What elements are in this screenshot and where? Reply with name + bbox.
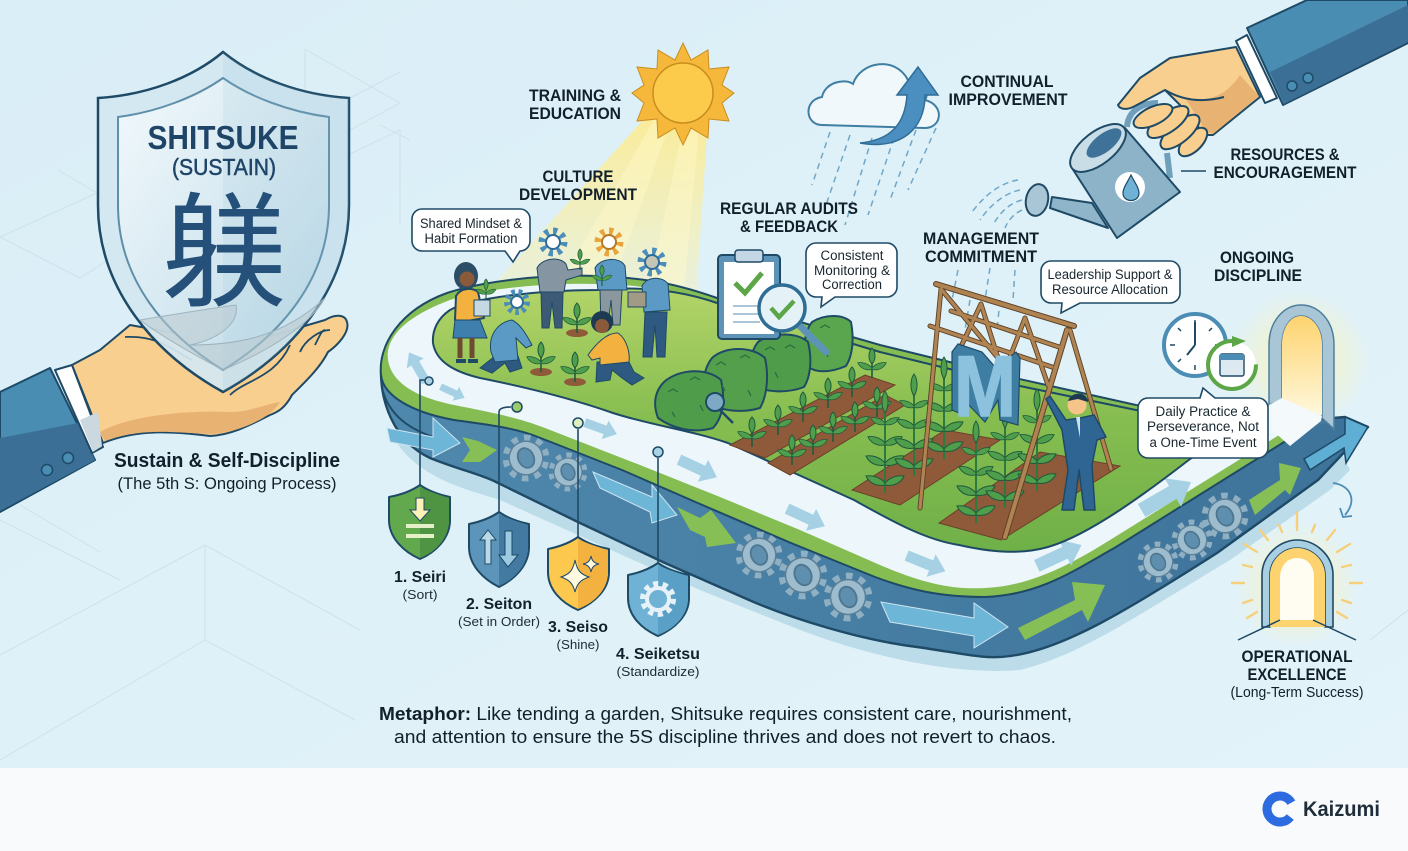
label: regular audits xyxy=(720,199,858,236)
hedges xyxy=(655,316,853,430)
label: regular audits: & FEEDBACK xyxy=(740,217,839,236)
excellence gate xyxy=(1232,512,1362,647)
icon: magnifier with check xyxy=(759,285,826,352)
process path: blue wall xyxy=(381,372,1368,657)
callout: consistent monitoring: Monitoring & xyxy=(814,263,890,278)
callout: daily practice: Daily Practice & xyxy=(1156,404,1250,419)
metaphor text: and attention to ensure the 5S discipline thrives and does not revert to chaos. xyxy=(394,727,1056,747)
label: culture development xyxy=(519,167,638,204)
metaphor text xyxy=(379,704,1072,747)
shield: Shitsuke xyxy=(98,52,349,392)
label: ongoing discipline: DISCIPLINE xyxy=(1214,266,1302,285)
callout: leadership support: Resource Allocation xyxy=(1052,282,1168,297)
Kaizumi logo: Kaizumi xyxy=(1303,798,1380,821)
label: resources and encouragement: RESOURCES & xyxy=(1230,145,1340,164)
shield: Seiton xyxy=(469,512,529,587)
label: resources and encouragement: ENCOURAGEMENT xyxy=(1214,163,1357,182)
label: 3. Seiso: (Shine) xyxy=(556,637,600,652)
5S pin dots xyxy=(425,377,663,457)
process path: white road xyxy=(388,284,1300,588)
label: training and education: TRAINING & xyxy=(529,86,621,105)
wall lower layer line xyxy=(383,392,445,441)
label: 2. Seiton xyxy=(458,596,540,629)
road direction arrows xyxy=(400,347,1199,582)
Kaizumi logo xyxy=(1262,791,1380,827)
icon: small magnifier xyxy=(706,393,733,423)
people xyxy=(453,231,670,385)
label: continual improvement: IMPROVEMENT xyxy=(948,90,1068,109)
person: kneeling yellow xyxy=(588,311,644,385)
callout: daily practice xyxy=(1138,388,1268,458)
label: ongoing discipline: ONGOING xyxy=(1220,248,1294,267)
label: continual improvement xyxy=(948,72,1068,109)
label: training and education xyxy=(529,86,621,123)
icon: rain xyxy=(812,128,1015,330)
person: standing blue xyxy=(628,251,670,357)
label: management commitment: MANAGEMENT xyxy=(923,229,1040,248)
label: operational excellence: (Long-Term Success) xyxy=(1230,685,1364,701)
label: 4. Seiketsu xyxy=(616,646,700,679)
metaphor text: Metaphor: Like tending a garden, Shitsuke requires consistent care, nourishment, xyxy=(379,704,1072,724)
kanji: 躾 xyxy=(162,152,286,332)
right hand xyxy=(1118,0,1408,161)
callout: consistent monitoring: Consistent xyxy=(820,248,884,263)
label: 2. Seiton: 2. Seiton xyxy=(466,596,532,613)
label: culture development: CULTURE xyxy=(542,167,614,186)
icon: cloud xyxy=(808,64,939,128)
label: operational excellence: OPERATIONAL xyxy=(1242,647,1352,666)
small crop plants xyxy=(738,348,891,465)
callout: shared mindset: Habit Formation xyxy=(424,231,518,246)
person: manager xyxy=(1046,394,1106,510)
shield title: SHITSUKE xyxy=(148,119,298,156)
icon: sun xyxy=(632,43,734,145)
person: kneeling with gear head xyxy=(480,292,532,373)
label: resources and encouragement xyxy=(1214,145,1357,182)
sun light beam xyxy=(480,118,708,345)
shield: Seiri xyxy=(389,485,450,559)
ongoing gate xyxy=(1230,290,1370,446)
label: 1. Seiri xyxy=(394,569,446,602)
person: standing grey xyxy=(537,231,590,328)
label: 3. Seiso: 3. Seiso xyxy=(548,619,608,636)
label: training and education: EDUCATION xyxy=(529,104,621,123)
process path: green stripe xyxy=(381,276,1321,597)
label: management commitment: COMMITMENT xyxy=(925,247,1038,266)
label: 4. Seiketsu: 4. Seiketsu xyxy=(616,646,700,663)
callout: shared mindset xyxy=(412,209,530,262)
left suit sleeve xyxy=(0,365,103,512)
letter M block: M xyxy=(954,339,1016,435)
garden xyxy=(433,289,1240,552)
callout: daily practice: a One-Time Event xyxy=(1150,435,1257,450)
icon: watering spray xyxy=(972,180,1022,228)
label: 1. Seiri: 1. Seiri xyxy=(394,569,446,586)
icon: clipboard xyxy=(718,250,780,339)
label: ongoing discipline xyxy=(1214,248,1302,285)
seedlings xyxy=(527,303,591,386)
arrow: to operational excellence xyxy=(1333,483,1352,517)
icon: calendar cycle xyxy=(1208,336,1256,389)
icon: improvement arrow xyxy=(860,67,938,144)
callout: consistent monitoring xyxy=(806,243,897,307)
soil beds xyxy=(730,375,1120,540)
5S pin lines xyxy=(420,380,658,563)
icon: watering can xyxy=(1023,103,1180,238)
left caption: Sustain & Self-Discipline xyxy=(114,450,340,472)
icon: clock xyxy=(1164,314,1226,376)
wall arrows and gears xyxy=(387,417,1368,648)
shield subtitle: (SUSTAIN) xyxy=(172,154,276,180)
person: woman with plant xyxy=(453,262,496,361)
wooden frame xyxy=(920,284,1111,537)
callout: leadership support xyxy=(1041,261,1180,313)
callout: leadership support: Leadership Support & xyxy=(1048,267,1172,282)
footer band xyxy=(0,768,1408,851)
label: management commitment xyxy=(923,229,1040,266)
label: 3. Seiso xyxy=(548,619,608,652)
label: operational excellence: EXCELLENCE xyxy=(1248,665,1346,684)
callout: consistent monitoring: Correction xyxy=(822,277,882,292)
person: standing blue orange gear xyxy=(592,231,627,325)
left caption xyxy=(114,450,340,493)
tall crop plants xyxy=(866,357,1056,523)
shield: Seiketsu xyxy=(628,563,689,636)
label: 2. Seiton: (Set in Order) xyxy=(458,614,540,629)
callout: daily practice: Perseverance, Not xyxy=(1147,419,1259,434)
label: 4. Seiketsu: (Standardize) xyxy=(616,664,700,679)
label: regular audits: REGULAR AUDITS xyxy=(720,199,858,218)
left hand holding shield xyxy=(72,316,347,443)
shield: Seiso xyxy=(548,537,609,610)
label: operational excellence xyxy=(1230,647,1364,701)
label: 1. Seiri: (Sort) xyxy=(402,587,438,602)
process path: outer wall shadow xyxy=(395,440,1350,671)
connector: resources xyxy=(1181,170,1206,172)
label: continual improvement: CONTINUAL xyxy=(960,72,1054,91)
left caption: (The 5th S: Ongoing Process) xyxy=(118,474,336,493)
label: culture development: DEVELOPMENT xyxy=(519,185,638,204)
callout: shared mindset: Shared Mindset & xyxy=(420,216,522,231)
